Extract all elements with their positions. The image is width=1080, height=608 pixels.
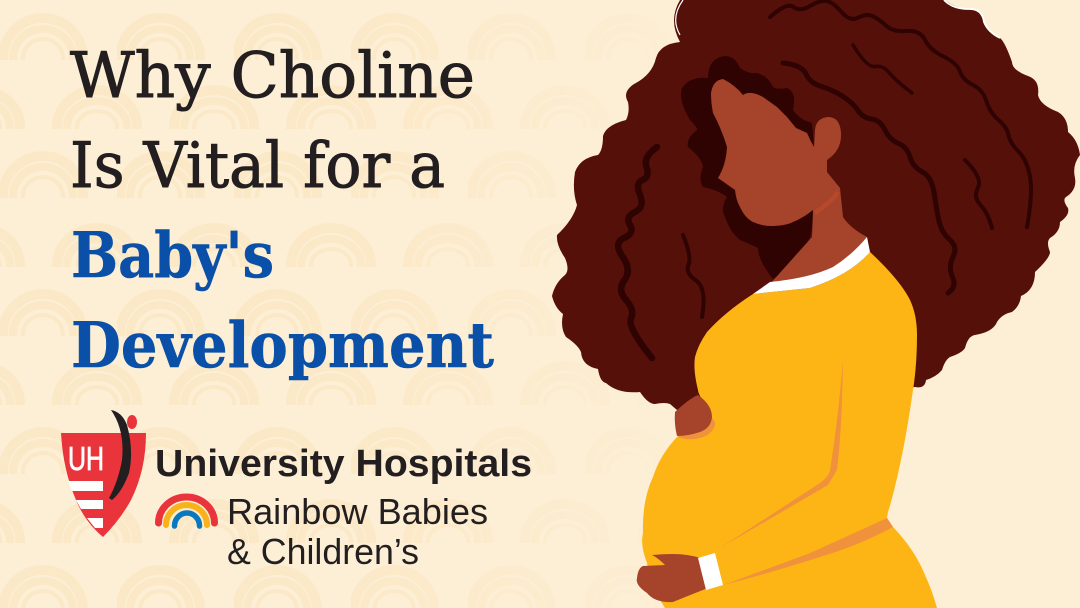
logo text: & Children's: & Children’s <box>227 531 419 572</box>
icon: UH shield: UH <box>68 440 104 477</box>
hair <box>552 0 1080 410</box>
hair: wavy strands <box>618 1 1031 358</box>
upper hand <box>675 395 712 436</box>
icon: UH shield <box>61 410 146 537</box>
logo text: University Hospitals: University Hospitals <box>155 443 532 485</box>
body: yellow dress <box>642 237 937 608</box>
illustration: pregnant woman <box>552 0 1080 608</box>
icon: rainbow <box>158 497 214 526</box>
title line: Baby's: Baby's <box>71 218 274 292</box>
logo text: Rainbow Babies: Rainbow Babies <box>227 491 488 532</box>
lower hand and cuff <box>637 553 723 602</box>
neck shadow line <box>815 192 838 213</box>
logo: University Hospitals Rainbow Babies & Children's <box>61 410 532 572</box>
title line: Why Choline: Why Choline <box>70 39 475 112</box>
title line: Development: Development <box>71 308 494 382</box>
face and neck <box>711 79 870 284</box>
dress folds <box>720 360 893 585</box>
white collar <box>753 237 870 294</box>
title line: Is Vital for a: Is Vital for a <box>70 129 445 202</box>
title <box>70 39 494 382</box>
